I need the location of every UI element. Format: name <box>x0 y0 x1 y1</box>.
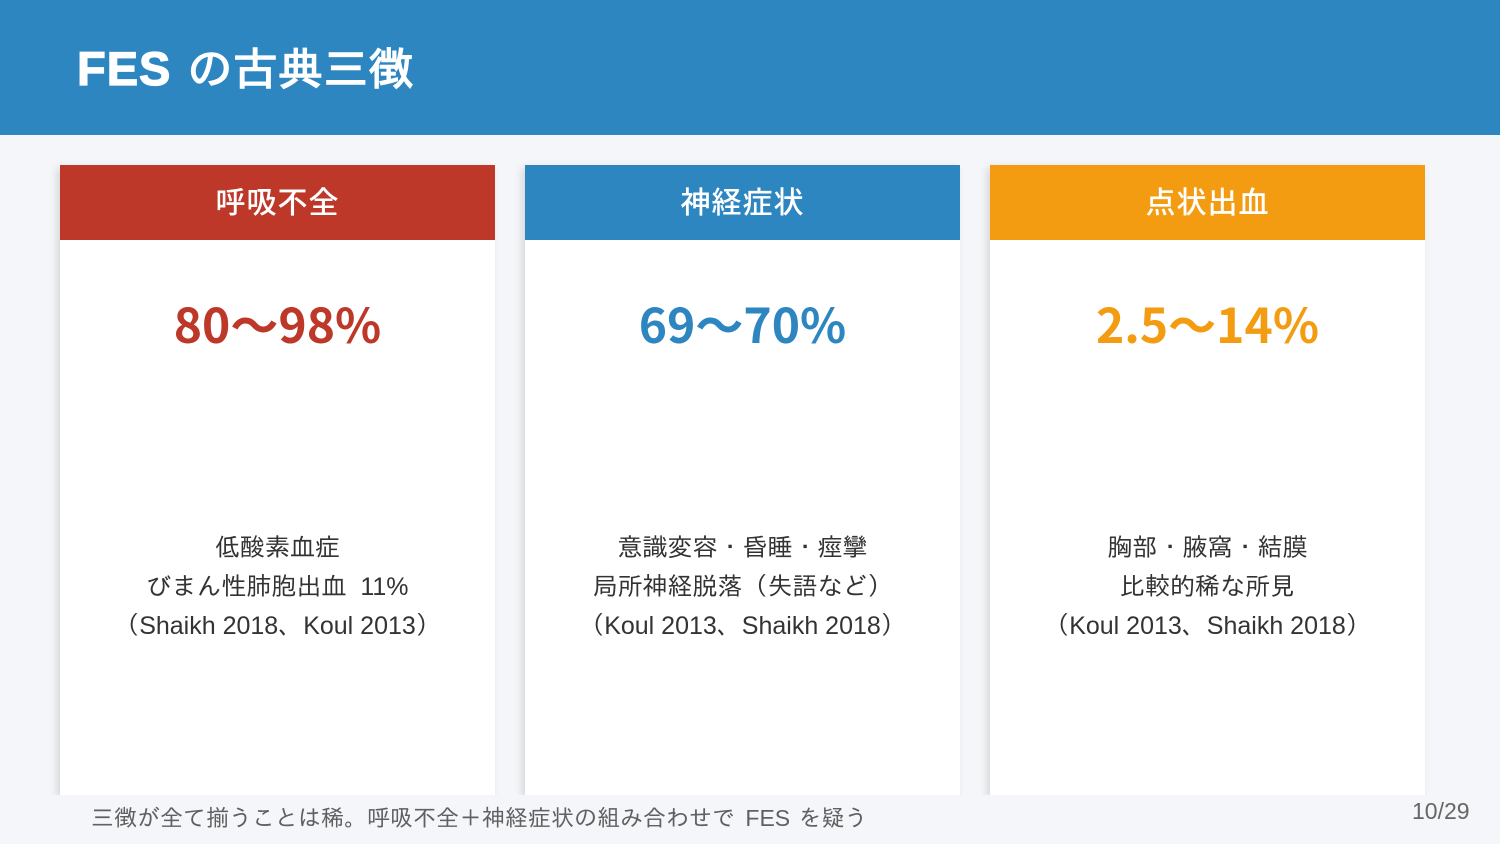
footer note: 三徴が全て揃うことは稀。呼吸不全＋神経症状の組み合わせで FES を疑う <box>91 805 868 831</box>
panel heading text: respiratory failure: 呼吸不全 <box>216 187 340 220</box>
panel: neurological symptoms <box>525 165 960 795</box>
description: neurological symptoms: （Koul 2013、Shaikh 2018） <box>579 612 906 640</box>
description: petechiae: 比較的稀な所見 <box>1120 573 1295 601</box>
description: neurological symptoms: 意識変容・昏睡・痙攣 <box>618 534 868 562</box>
stat: petechiae rate: 2.5～14% <box>1096 287 1319 357</box>
panel heading: neurological symptoms <box>525 165 960 240</box>
description: petechiae <box>1044 534 1371 640</box>
description: neurological symptoms: 局所神経脱落（失語など） <box>592 573 892 601</box>
header band <box>0 0 1500 135</box>
description: neurological symptoms <box>579 534 906 640</box>
panel: respiratory failure <box>60 165 495 795</box>
panel heading text: neurological symptoms: 神経症状 <box>680 187 804 220</box>
stat: respiratory failure rate: 80～98% <box>174 287 381 357</box>
panel heading text: petechiae: 点状出血 <box>1146 187 1270 220</box>
description: petechiae: 胸部・腋窩・結膜 <box>1108 534 1308 562</box>
description: respiratory failure: びまん性肺胞出血 11% <box>146 573 409 601</box>
panel heading: petechiae <box>990 165 1425 240</box>
page number: 10/29 <box>1412 798 1470 824</box>
panel: petechiae <box>990 165 1425 795</box>
stat: neurological symptoms rate: 69～70% <box>639 287 846 357</box>
title: FES の古典三徴 <box>77 42 414 95</box>
description: respiratory failure: （Shaikh 2018、Koul 2013） <box>114 612 441 640</box>
description: respiratory failure: 低酸素血症 <box>215 534 340 562</box>
panel heading: respiratory failure <box>60 165 495 240</box>
description: respiratory failure <box>114 534 441 640</box>
description: petechiae: （Koul 2013、Shaikh 2018） <box>1044 612 1371 640</box>
